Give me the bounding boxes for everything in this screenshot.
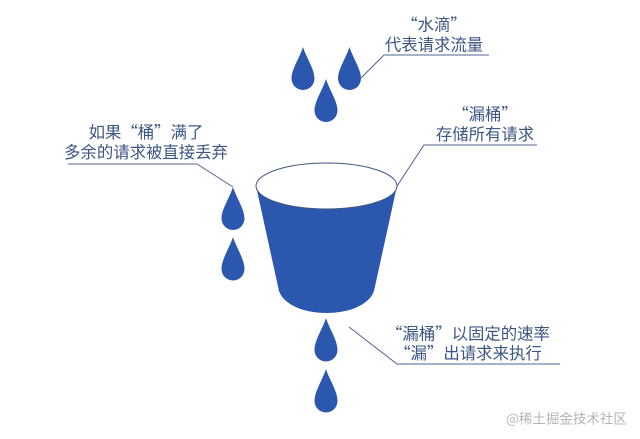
icon: leaking drop lower bbox=[314, 369, 338, 412]
callout: bucket leaks at a fixed rate bbox=[349, 320, 560, 364]
watermark: @稀土掘金技术社区 bbox=[506, 408, 627, 428]
group: overflow drops bbox=[222, 187, 244, 280]
callout: overflow is discarded: 如果“桶”满了 bbox=[89, 119, 203, 143]
icon: leaking drop upper bbox=[314, 318, 338, 362]
bucket opening bbox=[256, 163, 397, 209]
callout: overflow is discarded bbox=[64, 119, 233, 187]
callout: bucket stores all requests bbox=[397, 101, 537, 186]
group: incoming water drops bbox=[292, 47, 361, 122]
group: leaking drops bbox=[314, 318, 338, 412]
callout: water drops represent request traffic: 代表请求流量 bbox=[385, 32, 483, 56]
bucket bbox=[256, 163, 397, 313]
callout: bucket leaks at a fixed rate: “漏桶”以固定的速率 bbox=[386, 320, 550, 344]
icon: water drop center bbox=[314, 79, 338, 122]
callout: bucket stores all requests: 存储所有请求 bbox=[436, 121, 534, 145]
icon: overflow drop upper bbox=[222, 187, 244, 230]
callout: bucket stores all requests: “漏桶” bbox=[452, 101, 518, 125]
icon: overflow drop lower bbox=[222, 237, 244, 280]
icon: water drop right bbox=[338, 47, 361, 90]
callout: bucket leaks at a fixed rate: “漏”出请求来执行 bbox=[394, 340, 542, 364]
callout: water drops represent request traffic: “水滴” bbox=[401, 12, 467, 36]
callout: overflow is discarded: 多余的请求被直接丢弃 bbox=[64, 139, 228, 163]
icon: water drop left bbox=[292, 47, 314, 90]
bucket body bbox=[256, 186, 397, 313]
callout: water drops represent request traffic bbox=[361, 12, 489, 78]
